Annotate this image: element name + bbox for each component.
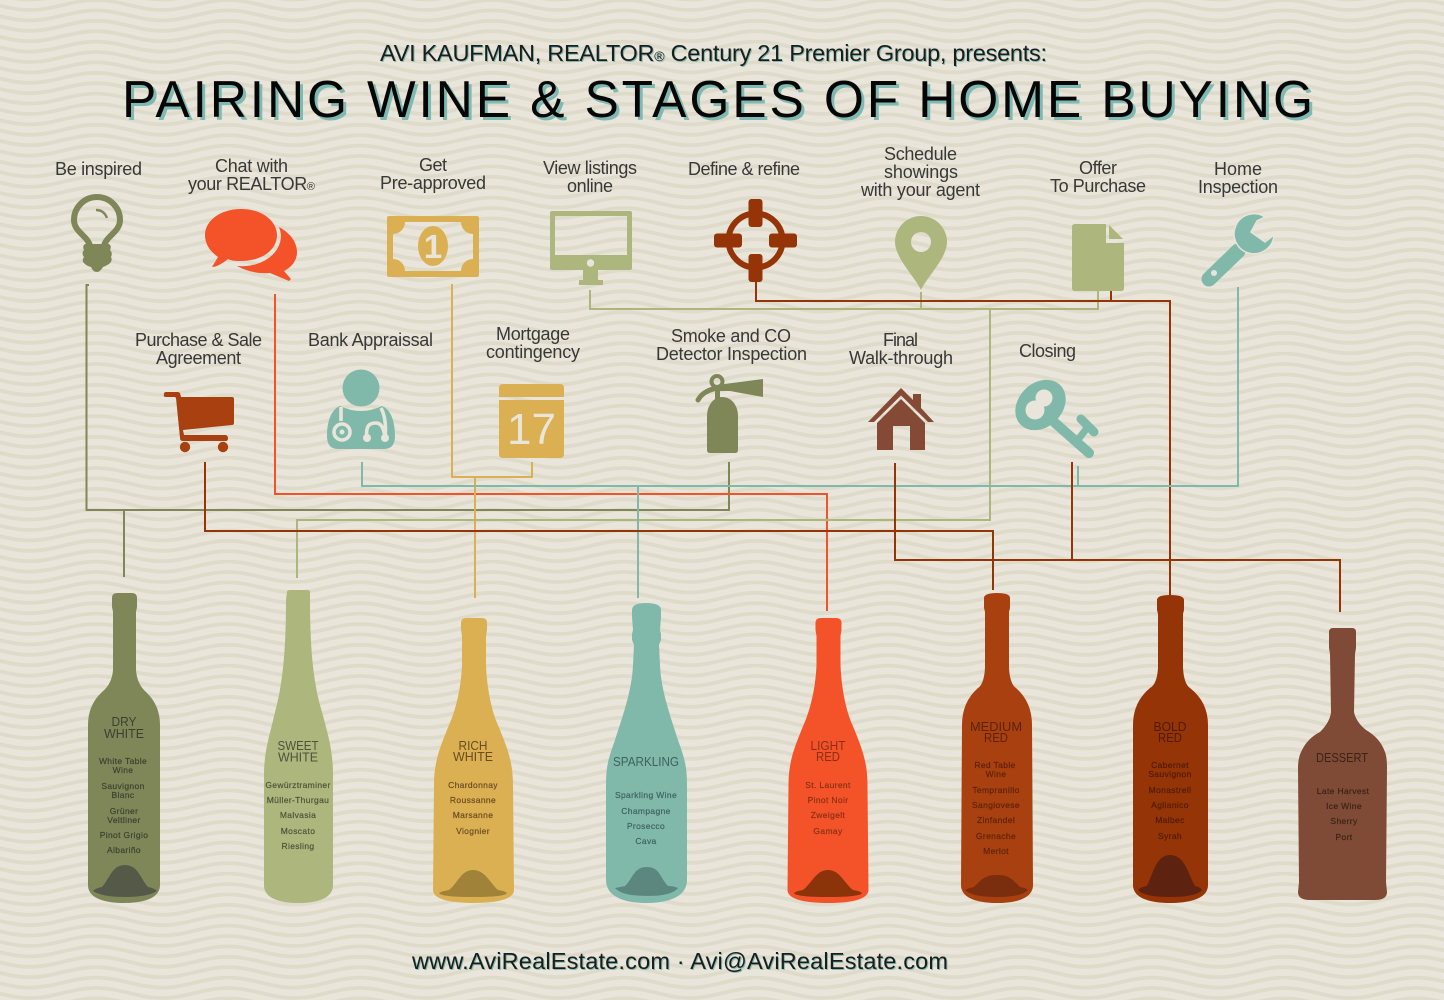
wine list: Aglianico	[1151, 800, 1189, 810]
wine list: LIGHT	[810, 738, 846, 753]
wine list: Red Table	[974, 760, 1016, 770]
wine list: Syrah	[1158, 831, 1182, 841]
wine list	[805, 738, 851, 836]
step: schedule showings: Schedule	[884, 144, 957, 164]
step: schedule showings	[860, 144, 980, 290]
bottle: medium red	[961, 593, 1033, 903]
icon: fire extinguisher	[698, 376, 763, 453]
wine list: Gamay	[813, 826, 843, 836]
wine list: Albariño	[107, 845, 141, 855]
step: schedule showings: with your agent	[860, 180, 980, 200]
wine list: Cabernet	[1151, 760, 1189, 770]
step: schedule showings: showings	[884, 162, 958, 182]
step: be inspired: Be inspired	[55, 159, 142, 179]
icon: key	[1005, 370, 1094, 453]
wine list: Tempranillo	[972, 785, 1020, 795]
wine list: Blanc	[111, 790, 135, 800]
icon: shopping cart	[164, 392, 234, 452]
icon: map pin	[895, 216, 947, 290]
connector: home inspection to sparkling	[362, 287, 1238, 598]
wine list: Chardonnay	[448, 780, 498, 790]
wine list: Sangiovese	[972, 800, 1020, 810]
sediment	[794, 870, 862, 897]
wine list: Champagne	[621, 806, 671, 816]
wine list: Moscato	[281, 826, 315, 836]
icon: chat bubbles	[205, 209, 297, 281]
step: view listings online	[543, 158, 637, 285]
sediment	[1138, 855, 1202, 897]
wine list	[448, 738, 498, 836]
wine list: Cava	[635, 836, 657, 846]
icon: computer monitor	[550, 211, 632, 285]
connector: walk-through and closing to dessert	[895, 462, 1340, 612]
step: chat with your realtor: Chat with	[215, 156, 288, 176]
icon: light bulb	[74, 197, 120, 272]
step: chat with your realtor	[188, 156, 315, 281]
wine list: RED	[1158, 730, 1182, 745]
wine list: Monastrell	[1149, 785, 1191, 795]
sediment	[965, 875, 1028, 897]
step: offer to purchase: Offer	[1079, 158, 1117, 178]
footer contact line: www.AviRealEstate.com · Avi@AviRealEstate.com	[411, 948, 948, 974]
step: define and refine: Define & refine	[688, 159, 800, 179]
wine list	[265, 738, 331, 851]
step: get pre-approved: Pre-approved	[380, 173, 486, 193]
step: be inspired	[55, 159, 142, 272]
wine list: Sauvignon	[1148, 769, 1192, 779]
wine list: Pinot Grigio	[100, 830, 148, 840]
sediment	[439, 870, 507, 897]
wine list	[970, 719, 1022, 856]
step: view listings online: View listings	[543, 158, 637, 178]
sediment	[615, 867, 678, 896]
step: purchase and sale agreement: Purchase & Sale	[135, 330, 262, 350]
step: offer to purchase: To Purchase	[1050, 176, 1146, 196]
wine list: DRY	[112, 714, 137, 729]
connector: view listings to sweet white	[297, 290, 1098, 578]
bottle: bold red	[1133, 595, 1208, 903]
step: get pre-approved	[380, 155, 486, 277]
step: final walk-through	[849, 330, 953, 450]
wine list: Zweigelt	[811, 810, 846, 820]
wine list: Pinot Noir	[808, 795, 848, 805]
bottle: rich white	[433, 618, 514, 903]
wine list: RED	[984, 730, 1008, 745]
presenter line: AVI KAUFMAN, REALTOR® Century 21 Premier Group, presents:	[380, 40, 1047, 66]
wine list: Prosecco	[627, 821, 665, 831]
wine list: Merlot	[983, 846, 1009, 856]
wine list: Zinfandel	[977, 815, 1015, 825]
wine list: RICH	[458, 738, 488, 753]
wine list: Grüner	[110, 806, 138, 816]
wine list: SPARKLING	[613, 754, 679, 769]
wine list: WHITE	[453, 749, 493, 764]
icon: house	[868, 388, 934, 450]
connector: pre-approved to rich white	[452, 284, 532, 598]
wine list: Viognier	[456, 826, 490, 836]
wine list: Riesling	[281, 841, 315, 851]
step: smoke and CO detector inspection: Smoke and CO	[671, 326, 791, 346]
wine list: BOLD	[1154, 719, 1186, 734]
step: define and refine	[688, 159, 800, 282]
bottle: light red	[788, 618, 868, 903]
icon: document	[1072, 224, 1124, 291]
connector: purchase agreement to medium red	[205, 462, 993, 590]
wine list	[1316, 750, 1369, 842]
wine list	[99, 714, 148, 855]
wine list: White Table	[99, 756, 147, 766]
wine list: Sauvignon	[101, 781, 145, 791]
wine list: WHITE	[278, 750, 318, 764]
wine list: Grenache	[976, 831, 1016, 841]
wine list: Wine	[986, 769, 1006, 779]
wine list: SWEET	[278, 738, 319, 753]
step: purchase and sale agreement	[135, 330, 262, 452]
icon: money bill: 1	[424, 228, 442, 265]
step: final walk-through: Walk-through	[849, 348, 953, 368]
step: home inspection: Home	[1214, 159, 1262, 179]
wine list: MEDIUM	[970, 719, 1022, 734]
bottle: sweet white	[264, 590, 333, 903]
step: closing: Closing	[1019, 341, 1076, 361]
step: home inspection	[1198, 159, 1278, 279]
wine list: Malvasia	[280, 810, 316, 820]
bottle: dessert	[1298, 628, 1387, 900]
title: PAIRING WINE & STAGES OF HOME BUYING	[122, 70, 1313, 128]
wine list: St. Laurent	[805, 780, 851, 790]
wine list: DESSERT	[1316, 750, 1368, 765]
wine list: Ice Wine	[1326, 801, 1362, 811]
wine list: Gewürztraminer	[265, 780, 331, 790]
sediment	[93, 865, 157, 897]
step: view listings online: online	[567, 176, 613, 196]
step: mortgage contingency	[486, 324, 580, 458]
step: final walk-through: Final	[883, 330, 918, 350]
wine list: Sherry	[1330, 816, 1358, 826]
connector: define and refine to bold red	[756, 282, 1170, 595]
step: get pre-approved: Get	[419, 155, 447, 175]
step: mortgage contingency: contingency	[486, 342, 580, 362]
step: offer to purchase	[1050, 158, 1146, 291]
wine list: WHITE	[104, 726, 144, 741]
bottle: dry white	[88, 593, 160, 903]
icon: calendar: 17	[507, 405, 556, 454]
wine list: Müller-Thurgau	[267, 795, 329, 805]
connector: chat to light red	[275, 294, 827, 611]
wine list: Roussanne	[450, 795, 496, 805]
wine list: Marsanne	[453, 810, 493, 820]
step: chat with your realtor: your REALTOR®	[188, 174, 315, 194]
step: bank appraisal	[308, 330, 433, 449]
wine list: Sparkling Wine	[615, 790, 677, 800]
step: smoke and CO detector inspection: Detector Inspection	[656, 344, 807, 364]
icon: doctor with stethoscope	[327, 370, 395, 449]
step: smoke and CO detector inspection	[656, 326, 807, 453]
wine list: Port	[1336, 832, 1353, 842]
step: purchase and sale agreement: Agreement	[156, 348, 241, 368]
step: mortgage contingency: Mortgage	[496, 324, 570, 344]
wine list	[1148, 719, 1192, 841]
bottle: sparkling	[606, 603, 687, 903]
wine list	[613, 754, 679, 846]
connector: be inspired to dry white	[86, 285, 729, 577]
wine list: RED	[816, 749, 840, 764]
step: closing	[1005, 341, 1094, 453]
wine list: Veltliner	[107, 815, 141, 825]
wine list: Late Harvest	[1317, 786, 1369, 796]
wine list: Wine	[113, 765, 133, 775]
icon: wrench	[1209, 214, 1274, 279]
step: home inspection: Inspection	[1198, 177, 1278, 197]
wine list: Malbec	[1155, 815, 1185, 825]
step: bank appraisal: Bank Appraissal	[308, 330, 433, 350]
icon: crosshair target	[714, 199, 797, 282]
